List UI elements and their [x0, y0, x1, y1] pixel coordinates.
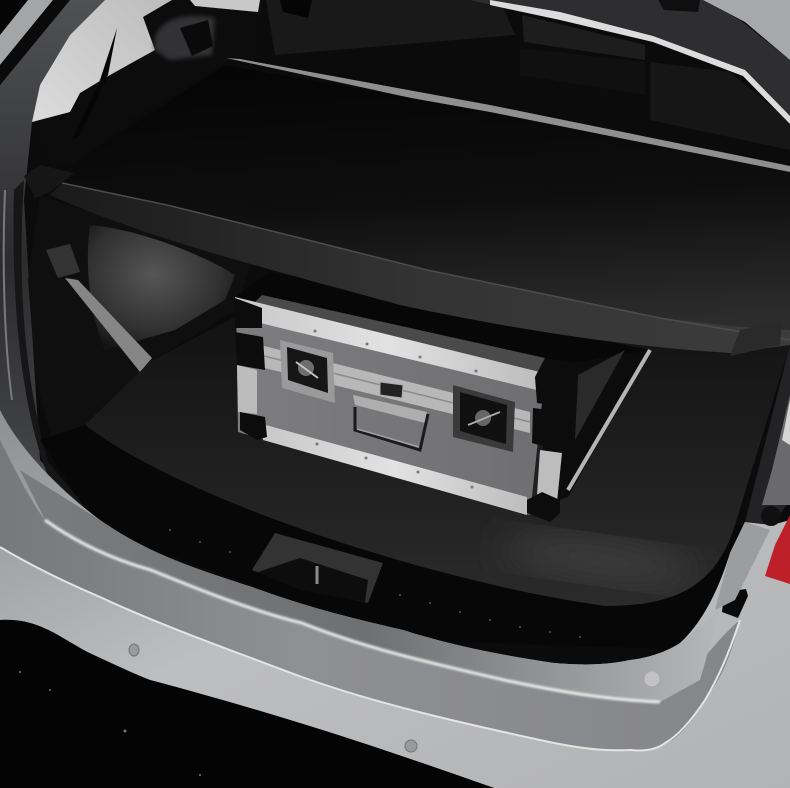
lower black bumper section	[0, 620, 494, 788]
corner protectors	[235, 298, 578, 522]
aluminium middle strip	[240, 340, 530, 433]
aluminium right strip	[537, 450, 562, 502]
shelf left mount	[24, 165, 74, 198]
boot floor	[85, 315, 790, 606]
aluminium top strip	[235, 297, 540, 390]
sill dots	[169, 529, 581, 638]
right latch	[453, 385, 515, 452]
door seal and body frame at left	[0, 0, 105, 525]
parcel shelf	[24, 65, 790, 356]
shelf right mount	[730, 322, 782, 356]
sill plate highlight strip	[45, 520, 660, 702]
case top rail	[255, 295, 545, 372]
shelf front edge band	[50, 183, 790, 353]
flight case	[235, 272, 650, 522]
upper right roof edge	[470, 0, 790, 124]
rear bumper lower body	[0, 410, 790, 788]
ground speckles	[19, 671, 201, 776]
rivets	[314, 330, 478, 488]
inner left side wall and panel	[28, 195, 250, 450]
loading sill	[40, 425, 745, 650]
aluminium bottom strip	[262, 424, 527, 515]
shelf surface	[30, 65, 790, 350]
pale upper pillar trim	[32, 0, 290, 180]
centre clasp	[380, 382, 403, 398]
aluminium left strip	[237, 365, 257, 414]
white crease line on bumper	[0, 547, 740, 750]
rear seats	[262, 0, 790, 170]
parking sensors	[129, 644, 660, 752]
tailgate pillar and lamp	[715, 345, 790, 618]
scuff plate darker band	[0, 440, 740, 751]
carrying handle	[353, 395, 428, 450]
case top	[235, 272, 650, 372]
case right side	[540, 350, 650, 505]
parcel shelf support bar	[226, 58, 790, 177]
sill cover plate	[20, 470, 720, 702]
left latch	[280, 340, 335, 403]
case front face	[236, 298, 545, 515]
sill recess and hook	[252, 533, 383, 603]
floor light patch	[498, 524, 702, 596]
